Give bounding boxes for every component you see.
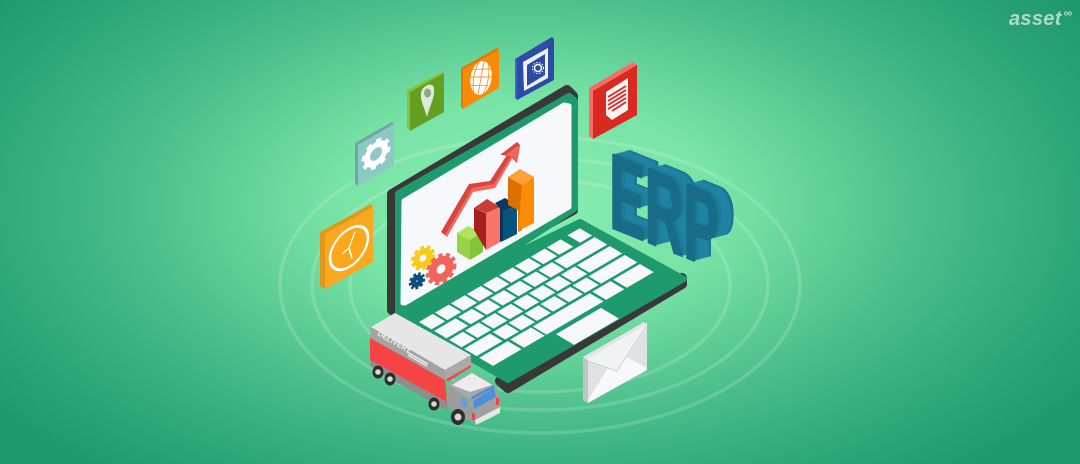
cargo end bbox=[445, 355, 471, 380]
yellow gear bbox=[414, 246, 432, 270]
blue gear bbox=[410, 273, 424, 289]
concentric rings bbox=[280, 137, 800, 433]
arrow bbox=[441, 142, 520, 236]
icon: document tile bbox=[589, 62, 637, 139]
bar chart with rising arrow bbox=[441, 142, 534, 260]
delivery truck bbox=[370, 313, 500, 425]
icon: globe tile bbox=[461, 48, 499, 109]
orange bar bbox=[508, 169, 534, 185]
delivery label: DELIVERY bbox=[376, 329, 413, 355]
green cube bbox=[457, 226, 483, 240]
cab bbox=[448, 385, 473, 423]
red gear bbox=[428, 253, 454, 285]
gears bbox=[410, 246, 454, 289]
cargo side bbox=[370, 327, 445, 380]
red bar bbox=[474, 199, 500, 213]
laptop screen bbox=[403, 105, 569, 303]
wheels bbox=[372, 366, 465, 425]
3D ERP lettering: ERP bbox=[609, 129, 719, 294]
cargo roof bbox=[371, 313, 471, 370]
keyboard bbox=[419, 228, 676, 379]
logo: asset: asset∞ bbox=[1009, 6, 1073, 30]
laptop bbox=[392, 90, 684, 388]
laptop base bbox=[392, 222, 684, 388]
icon: settings gear tile bbox=[355, 122, 394, 186]
blue bar bbox=[495, 198, 517, 212]
icon: clock tile bbox=[320, 204, 373, 289]
envelope bbox=[583, 322, 647, 403]
icon: safe tile bbox=[515, 37, 554, 100]
laptop lid bbox=[392, 90, 574, 316]
icon: location pin tile bbox=[407, 72, 444, 131]
